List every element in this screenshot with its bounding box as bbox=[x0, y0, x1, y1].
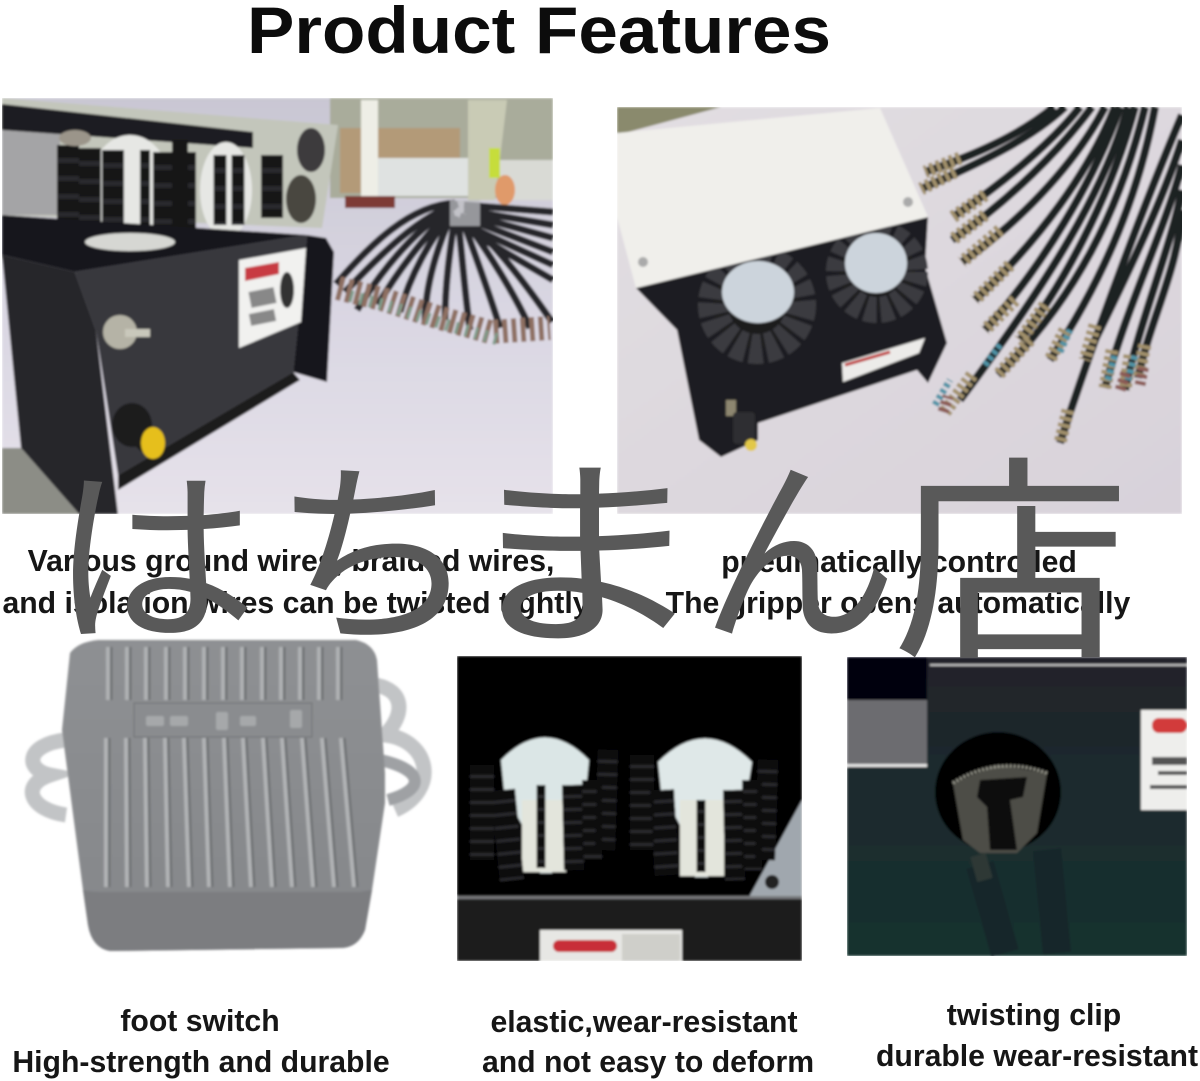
caption: pneumatic control: The gripper opens automatically bbox=[666, 587, 1131, 620]
watermark: 店 bbox=[892, 445, 1130, 687]
panel: foot switch bbox=[32, 640, 424, 951]
caption: twisting clip bbox=[876, 999, 1198, 1073]
panel: twisting clip bbox=[847, 657, 1187, 956]
caption: twisting clip: durable wear-resistant bbox=[876, 1040, 1198, 1073]
caption: twisting clip: twisting clip bbox=[947, 999, 1121, 1032]
caption: elastic bbox=[482, 1006, 814, 1079]
caption: foot switch: High-strength and durable bbox=[12, 1046, 390, 1079]
watermark: は bbox=[49, 456, 258, 668]
watermark: ま bbox=[456, 445, 709, 672]
panel: machine with twisted wires bbox=[2, 98, 553, 514]
caption: elastic: elastic,wear-resistant bbox=[490, 1006, 798, 1039]
watermark bbox=[49, 445, 1130, 687]
watermark: ん bbox=[700, 446, 898, 669]
caption: ground wires: and isolation wires can be twisted tightly bbox=[2, 587, 590, 620]
caption: foot switch: foot switch bbox=[120, 1005, 280, 1038]
panel: machine with open gripper cover bbox=[617, 107, 1182, 514]
caption: ground wires bbox=[2, 545, 590, 620]
caption: elastic: and not easy to deform bbox=[482, 1046, 814, 1079]
caption: ground wires: Various ground wires, braided wires, bbox=[28, 545, 554, 578]
caption: foot switch bbox=[12, 1005, 390, 1079]
watermark: ち bbox=[271, 448, 480, 670]
caption: pneumatic control bbox=[666, 546, 1131, 620]
panel: elastic brushes bbox=[457, 656, 802, 961]
caption: pneumatic control: pneumatically controlled bbox=[721, 546, 1077, 579]
